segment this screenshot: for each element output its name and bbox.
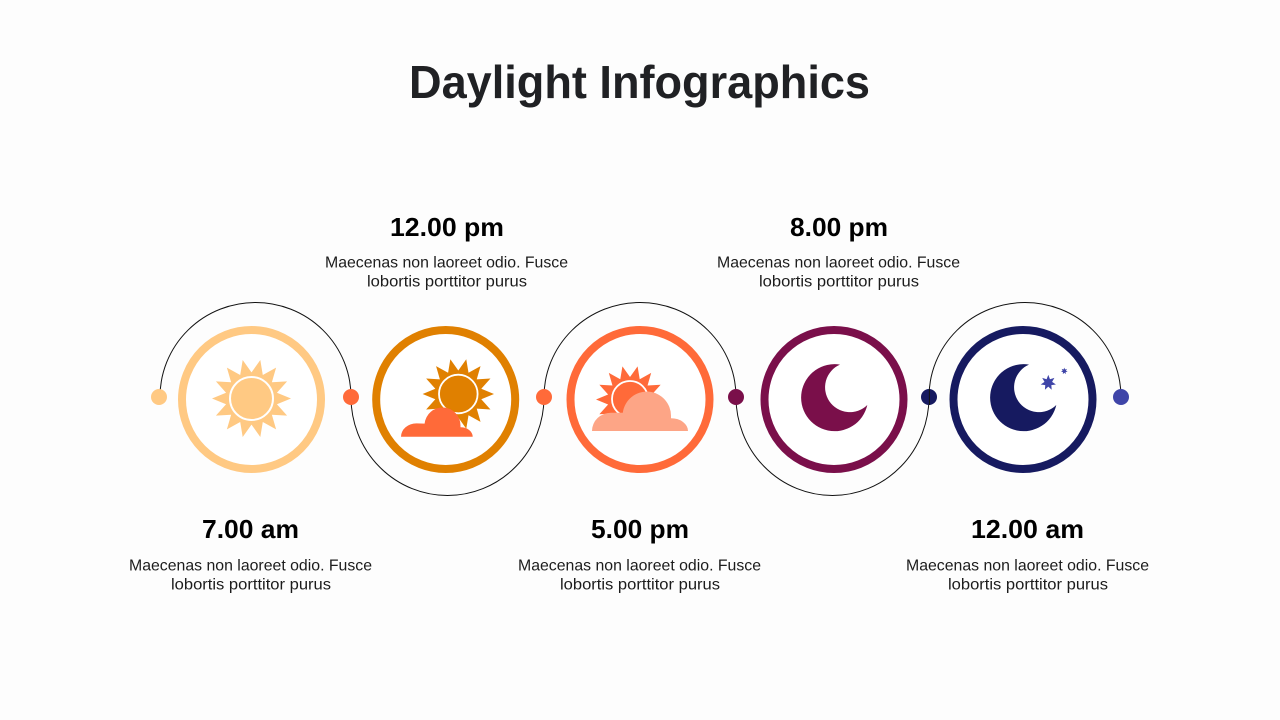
heading: 7.00 am: 7.00 am [202,514,299,544]
text: description [129,558,372,594]
ring: step 5 [954,330,1092,469]
text: description: lobortis porttitor purus [171,576,331,594]
text: description: Maecenas non laoreet odio. Fusce [717,254,960,272]
step 2: 12.00 pm [325,212,568,469]
text: description [518,558,761,594]
text: description: Maecenas non laoreet odio. Fusce [325,254,568,272]
connector dots [151,389,1129,405]
text: description [906,558,1149,594]
connector: serpentine line [160,302,1121,495]
heading: 8.00 pm: 8.00 pm [790,212,888,242]
text: description: lobortis porttitor purus [560,576,720,594]
icon: sun behind cloud [592,366,688,433]
text: description [717,254,960,290]
text: description: lobortis porttitor purus [759,274,919,290]
text: description: Maecenas non laoreet odio. Fusce [906,558,1149,574]
step 5: 12.00 am [906,330,1149,594]
text: description [325,254,568,290]
ring: step 3 [570,330,710,469]
heading: 12.00 pm: 12.00 pm [390,212,504,242]
ring: step 1 [182,330,321,469]
step 1: 7.00 am [129,330,372,594]
text: description: Maecenas non laoreet odio. Fusce [129,558,372,574]
icon: moon and stars [990,364,1068,431]
ring: step 4 [764,330,904,469]
text: description: lobortis porttitor purus [367,274,527,290]
step 3: 5.00 pm [518,330,761,594]
step 4: 8.00 pm [717,212,960,469]
ring: step 2 [376,330,515,469]
heading: 5.00 pm: 5.00 pm [591,514,689,544]
icon: sun [212,360,291,437]
text: description: lobortis porttitor purus [948,576,1108,594]
title: Daylight Infographics [409,56,870,108]
icon: sun with cloud [401,359,494,437]
icon: crescent moon [801,364,867,431]
heading: 12.00 am: 12.00 am [971,514,1084,544]
text: description: Maecenas non laoreet odio. Fusce [518,558,761,574]
